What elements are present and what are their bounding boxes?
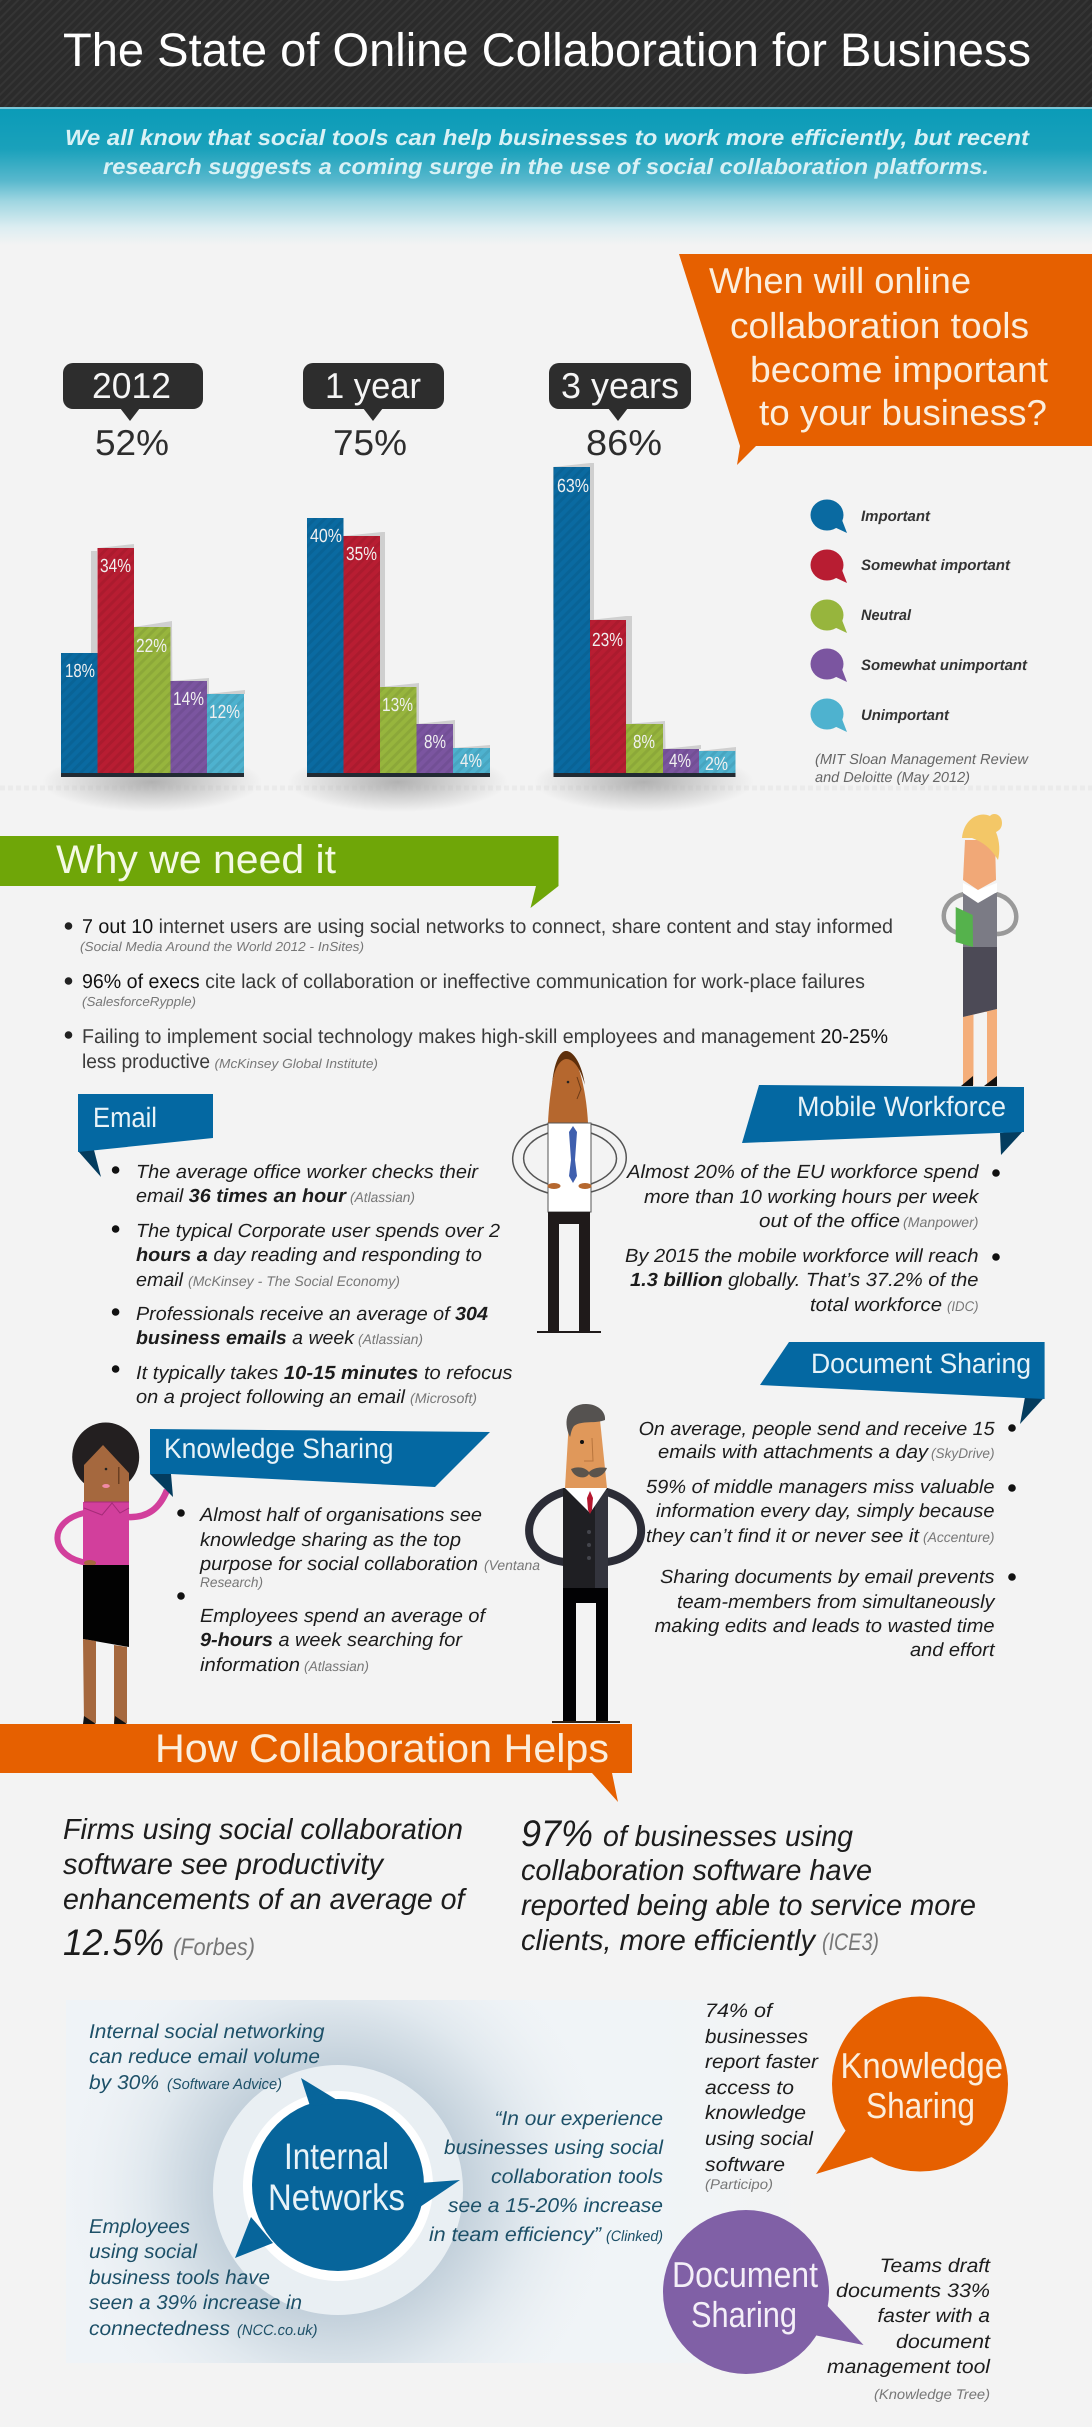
bar chart: 1 year: 4% [460, 751, 482, 772]
stat: clients: of businesses using [603, 1821, 853, 1853]
document stat text [827, 2255, 992, 2402]
section: knowledge sharing [150, 1429, 540, 1676]
text: email volume: can reduce email volume [89, 2046, 320, 2068]
document sharing bullets: (Accenture) [923, 1529, 994, 1545]
bullet: execs: 96% of execs cite lack of collaboration or ineffective communication for work-place failures [82, 971, 865, 993]
stat: productivity [63, 1814, 467, 1963]
mobile workforce flag: Mobile Workforce [797, 1091, 1006, 1122]
section: email [78, 1094, 513, 1408]
document stat text: faster with a [878, 2305, 990, 2327]
email bullets: Professionals receive an average of 304 [136, 1304, 488, 1325]
why we need it bullets [65, 916, 893, 1073]
stat: clients [521, 1813, 976, 1957]
bar chart: 1 year [288, 363, 508, 812]
heading: how collaboration helps: How Collaboration Helps [155, 1727, 609, 1771]
document sharing flag [760, 1342, 1045, 1424]
bar chart: 3 years: 4% [669, 751, 691, 772]
label: 1 year pill [303, 363, 444, 421]
text: quote: “In our experience [494, 2108, 663, 2130]
stat: productivity: Firms using social collaboration [63, 1814, 463, 1846]
bar chart: 1 year: 13% [382, 695, 413, 716]
knowledge sharing bullets: Employees spend an average of [200, 1606, 487, 1627]
knowledge stat text: knowledge [705, 2102, 806, 2124]
title: The State of Online Collaboration for Business [63, 23, 1031, 76]
text: email volume: Internal social networking [89, 2021, 324, 2043]
stat: productivity: enhancements of an average of [63, 1884, 467, 1916]
bar chart: 3 years: 8% [633, 732, 655, 753]
stat: clients: clients, more efficiently [521, 1925, 817, 1957]
email bullets: (McKinsey - The Social Economy) [188, 1273, 400, 1289]
text: connectedness: connectedness [89, 2318, 230, 2340]
panel: document sharing stat [663, 2210, 992, 2402]
text: connectedness: using social [89, 2241, 198, 2263]
bar chart: 2012: 14% [173, 689, 204, 710]
mobile workforce bullets: 1.3 billion globally. That’s 37.2% of the [630, 1270, 978, 1291]
orange question callout: collaboration tools [730, 305, 1029, 346]
intro text: We all know that social tools can help businesses to work more efficiently, but recent [65, 125, 1031, 150]
label: 3 years pill [549, 363, 691, 421]
legend: neutral: Neutral [861, 607, 912, 624]
text: quote: businesses using social [444, 2137, 664, 2159]
stat: productivity: (Forbes) [173, 1934, 255, 1961]
document sharing bullets: making edits and leads to wasted time [655, 1616, 995, 1637]
knowledge sharing bullets: knowledge sharing as the top [200, 1530, 461, 1551]
legend: unimportant: Unimportant [861, 707, 950, 724]
intro text: research suggests a coming surge in the use of social collaboration platforms. [103, 154, 989, 179]
bullet: productivity: less productive [82, 1051, 210, 1073]
orange question callout: When will online [709, 260, 971, 301]
knowledge stat text: access to [705, 2077, 794, 2099]
document sharing bullets: On average, people send and receive 15 [639, 1419, 995, 1440]
chart source: (MIT Sloan Management Review [815, 752, 1030, 768]
purple speech bubble: Sharing [691, 2294, 797, 2335]
bullet: productivity: (McKinsey Global Institute) [214, 1056, 378, 1071]
knowledge stat text: software [705, 2154, 785, 2176]
panel: internal networks [89, 2000, 664, 2363]
mobile workforce bullets: out of the office [759, 1211, 900, 1232]
bar chart: 1 year: 40% [310, 526, 342, 547]
stat: clients: collaboration software have [521, 1855, 872, 1887]
heading: why we need it [0, 836, 558, 908]
email bullets: email 36 times an hour [136, 1186, 348, 1207]
document sharing bullets: information every day, simply because [656, 1501, 994, 1522]
intro text [65, 125, 1031, 179]
bullet: execs: (SalesforceRypple) [82, 994, 196, 1009]
label: 2012 pill [63, 363, 203, 421]
mobile workforce bullets: more than 10 working hours per week [644, 1187, 980, 1208]
document sharing bullets: emails with attachments a day [658, 1442, 930, 1463]
knowledge stat text: report faster [705, 2051, 820, 2073]
knowledge sharing bullets: Almost half of organisations see [199, 1505, 482, 1526]
email bullets: (Atlassian) [350, 1189, 415, 1205]
bar chart: 1 year: 35% [346, 544, 377, 565]
document sharing flag: Document Sharing [811, 1348, 1031, 1379]
panel: knowledge sharing stat [705, 1996, 1008, 2192]
knowledge sharing bullets: 9-hours a week searching for [200, 1630, 463, 1651]
bullet: social networks: (Social Media Around the World 2012 - InSites) [80, 939, 364, 954]
text: quote [429, 2108, 664, 2246]
knowledge sharing bullets: (Atlassian) [304, 1658, 369, 1674]
bar chart: 3 years [534, 363, 754, 812]
legend: important [810, 500, 931, 533]
mobile workforce bullets: Almost 20% of the EU workforce spend [626, 1162, 980, 1183]
bar chart: 2012: 34% [100, 556, 131, 577]
section: document sharing [639, 1342, 1045, 1661]
knowledge sharing bullets [177, 1505, 540, 1676]
email flag: Email [93, 1102, 157, 1133]
knowledge stat text: businesses [705, 2026, 808, 2048]
knowledge stat text: using social [705, 2128, 814, 2150]
mobile workforce bullets: By 2015 the mobile workforce will reach [625, 1246, 978, 1267]
bullet: execs [65, 971, 865, 1009]
legend: neutral [810, 600, 912, 633]
knowledge sharing flag: Knowledge Sharing [164, 1433, 394, 1464]
bar chart: 1 year: 8% [424, 732, 446, 753]
bar chart: 2012: 12% [209, 702, 240, 723]
text: email volume: by 30% [89, 2072, 159, 2094]
document sharing bullets: they can’t find it or never see it [646, 1526, 920, 1547]
document stat text: (Knowledge Tree) [874, 2386, 990, 2402]
character: man with blue tie [513, 1051, 626, 1333]
document sharing bullets [639, 1419, 1016, 1661]
mobile workforce flag [742, 1085, 1024, 1155]
legend: somewhat important [810, 550, 1011, 583]
text: connectedness: (NCC.co.uk) [237, 2322, 318, 2339]
knowledge sharing flag [150, 1429, 490, 1497]
document sharing bullets: Sharing documents by email prevents [660, 1567, 995, 1588]
email bullets: hours a day reading and responding to [136, 1245, 482, 1266]
character: woman in pink [57, 1422, 167, 1724]
email bullets: on a project following an email [136, 1387, 406, 1408]
chart legend [810, 500, 1028, 732]
legend: somewhat unimportant [810, 648, 1028, 682]
bar chart: 3 years: 23% [592, 630, 623, 651]
email bullets: (Microsoft) [410, 1390, 477, 1406]
email flag [78, 1094, 213, 1177]
stat: clients: 97% [521, 1813, 593, 1854]
label: 3 years pill: 3 years [561, 365, 679, 406]
email bullets: The average office worker checks their [136, 1162, 479, 1183]
document sharing bullets: (SkyDrive) [931, 1445, 994, 1461]
document sharing bullets: 59% of middle managers miss valuable [646, 1477, 994, 1498]
legend: unimportant [810, 698, 950, 732]
section: mobile workforce [625, 1085, 1024, 1316]
stat: productivity: 12.5% [63, 1922, 164, 1963]
document stat text: document [896, 2331, 992, 2353]
purple speech bubble [663, 2210, 864, 2374]
email bullets: business emails a week [136, 1328, 356, 1349]
text: quote: see a 15-20% increase [448, 2195, 663, 2217]
orange speech bubble [816, 1996, 1008, 2174]
text: quote: in team efficiency” [429, 2224, 602, 2246]
orange question callout [679, 254, 1092, 465]
knowledge sharing bullets: (Ventana [484, 1557, 540, 1573]
internal networks speech bubble: Networks [268, 2177, 405, 2218]
bar chart: 3 years: 86% [586, 422, 662, 463]
document stat text: Teams draft [880, 2255, 992, 2277]
mobile workforce bullets: (IDC) [947, 1298, 978, 1314]
bullet: social networks: 7 out 10 internet users are using social networks to connect, share content and stay informed [82, 916, 893, 938]
text: connectedness [89, 2216, 318, 2340]
orange speech bubble: Sharing [866, 2085, 975, 2126]
bar chart: 2012: 52% [95, 422, 169, 463]
heading: why we need it: Why we need it [56, 838, 336, 882]
orange question callout: to your business? [759, 392, 1047, 433]
text: quote: collaboration tools [491, 2166, 663, 2188]
email bullets: The typical Corporate user spends over 2 [136, 1221, 500, 1242]
purple speech bubble: Document [672, 2254, 818, 2295]
bullet: social networks [65, 916, 893, 954]
document sharing bullets: and effort [910, 1640, 995, 1661]
legend: somewhat unimportant: Somewhat unimportant [861, 657, 1028, 674]
bar chart: 3 years: 63% [557, 476, 589, 497]
legend: important: Important [861, 508, 931, 525]
stat: clients: (ICE3) [822, 1929, 879, 1956]
text: connectedness: Employees [89, 2216, 190, 2238]
character: man with moustache [529, 1404, 641, 1723]
bar chart: 2012: 22% [136, 636, 167, 657]
header band with title [0, 0, 1092, 109]
knowledge sharing bullets: Research) [200, 1574, 263, 1590]
knowledge sharing bullets: information [200, 1655, 300, 1676]
mobile workforce bullets [625, 1162, 1000, 1316]
heading: how collaboration helps [0, 1724, 632, 1802]
document sharing bullets: team-members from simultaneously [677, 1592, 996, 1613]
email bullets: (Atlassian) [358, 1331, 423, 1347]
knowledge stat text: 74% of [705, 2000, 775, 2022]
label: 1 year pill: 1 year [325, 365, 421, 406]
stat: clients: reported being able to service more [521, 1890, 976, 1922]
stat: productivity: software see productivity [63, 1849, 384, 1881]
email bullets: email [136, 1270, 184, 1291]
document stat text: management tool [827, 2356, 991, 2378]
internal networks speech bubble [213, 2065, 463, 2315]
document stat text: documents 33% [836, 2280, 990, 2302]
bar chart: 1 year: 75% [333, 422, 407, 463]
text: connectedness: business tools have [89, 2267, 270, 2289]
internal networks speech bubble: Internal [284, 2136, 389, 2177]
text: quote: (Clinked) [606, 2228, 663, 2245]
bar chart: 2012: 18% [65, 661, 95, 682]
knowledge stat text: (Participo) [705, 2176, 773, 2192]
legend: somewhat important: Somewhat important [861, 557, 1011, 574]
text: email volume: (Software Advice) [167, 2076, 282, 2093]
mobile workforce bullets: (Manpower) [903, 1214, 978, 1230]
text: connectedness: seen a 39% increase in [89, 2292, 302, 2314]
text: email volume [89, 2021, 324, 2094]
bar chart: 2012 [42, 363, 262, 812]
email bullets: It typically takes 10-15 minutes to refocus [136, 1363, 513, 1384]
knowledge stat text [705, 2000, 820, 2192]
orange question callout: become important [750, 349, 1048, 390]
chart source [815, 752, 1030, 786]
bar chart: 3 years: 2% [705, 754, 728, 775]
chart source: and Deloitte (May 2012) [815, 770, 970, 786]
email bullets [112, 1162, 513, 1408]
orange speech bubble: Knowledge [840, 2045, 1003, 2086]
bullet: productivity [65, 1026, 888, 1073]
knowledge sharing bullets: purpose for social collaboration [199, 1554, 478, 1575]
bullet: productivity: Failing to implement social technology makes high-skill employees and management 20-25% [82, 1026, 888, 1048]
mobile workforce bullets: total workforce [810, 1295, 942, 1316]
label: 2012 pill: 2012 [92, 365, 171, 406]
character: blonde woman with clipboard [944, 814, 1016, 1086]
